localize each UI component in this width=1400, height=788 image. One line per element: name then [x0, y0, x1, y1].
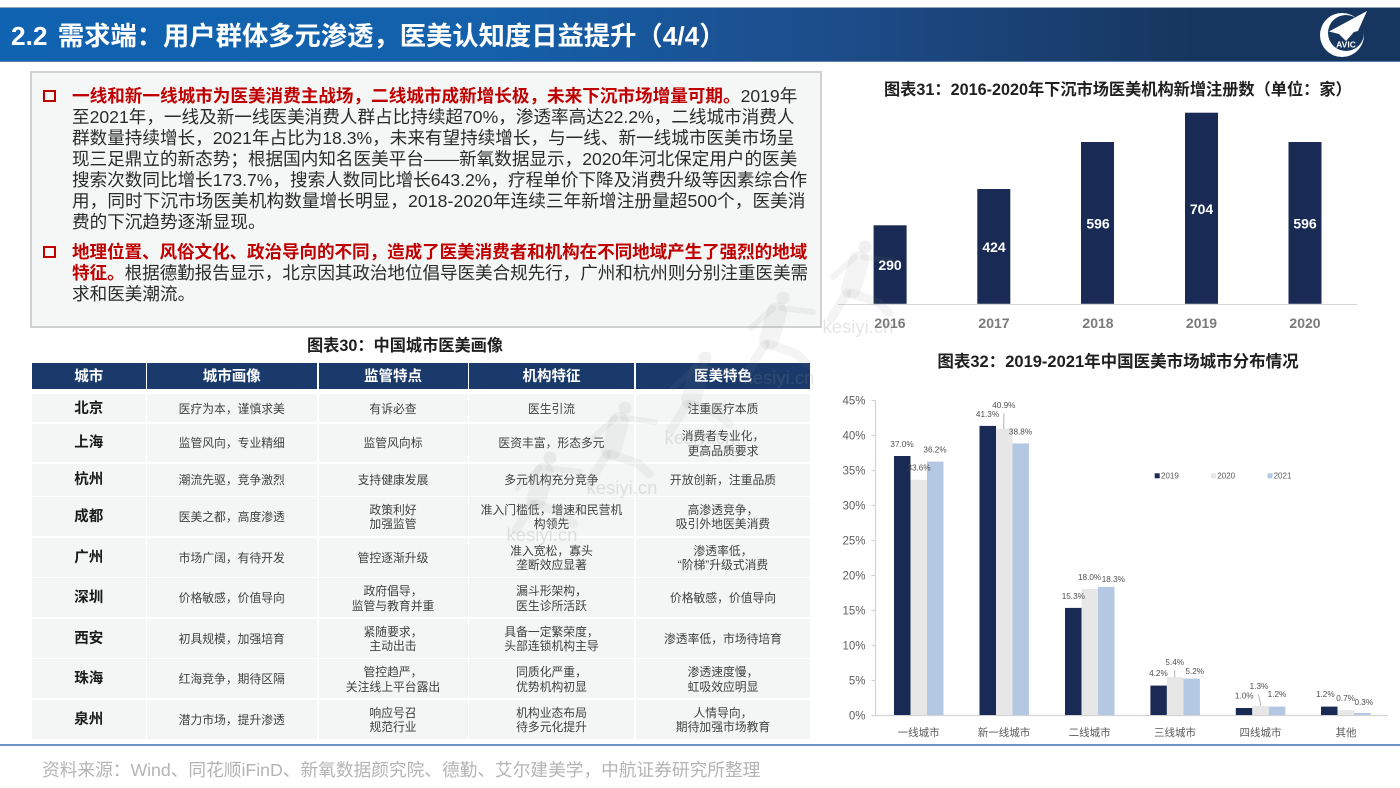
chart legend: 2019: [1161, 472, 1179, 481]
row: 上海: 消费者专业化，: [682, 429, 764, 443]
row: 西安: 渗透率低，市场待培育: [664, 632, 782, 646]
row: 成都: 高渗透竞争，: [688, 503, 758, 517]
paragraph one: 至2021年，一线及新一线医美消费人群占比持续超70%，渗透率高达22.2%，二线城市消费人: [72, 106, 794, 126]
bar chart: city tier distribution: [842, 396, 1388, 739]
row: 成都: 吸引外地医美消费: [676, 517, 770, 531]
bar chart: new registrations 2016-2020: 290: [878, 257, 902, 273]
bar chart: new registrations 2016-2020: 2020: [1289, 315, 1321, 331]
watermark: kesiyi.cn: [507, 524, 577, 545]
watermark: kesiyi.cn: [744, 367, 814, 388]
row: 北京: 有诉必查: [369, 402, 417, 416]
watermark: kesiyi.cn: [665, 427, 735, 448]
row: 泉州: 期待加强市场教育: [676, 720, 770, 734]
bar chart: new registrations 2016-2020: [838, 112, 1357, 331]
bar chart: city tier distribution: 0%: [849, 710, 866, 722]
row: 深圳: 漏斗形架构，: [516, 584, 587, 598]
row: 成都: 政策利好: [369, 503, 417, 517]
bar chart: city tier distribution: 38.8%: [1009, 428, 1032, 436]
watermark: kesiyi.cn: [823, 316, 893, 337]
row: 泉州: 响应号召: [369, 706, 417, 720]
row: 珠海: [32, 659, 810, 698]
bar chart: new registrations 2016-2020: 2019: [1186, 315, 1217, 331]
row: 深圳: 深圳: [74, 590, 103, 606]
row: 上海: 监管风向标: [364, 436, 422, 450]
bar chart: city tier distribution: 0.7%: [1336, 694, 1355, 703]
row: 泉州: 规范行业: [369, 720, 417, 734]
row: 深圳: 监管与教育并重: [352, 599, 434, 613]
row: 珠海: 珠海: [74, 671, 103, 687]
paragraph one: 一线和新一线城市为医美消费主战场，二线城市成新增长极，未来下沉市场增量可期。2019年: [72, 86, 797, 106]
row: 成都: 成都: [74, 509, 103, 525]
bar chart: city tier distribution: 10%: [842, 640, 866, 652]
source note: 资料来源：Wind、同花顺iFinD、新氧数据颜究院、德勤、艾尔建美学，中航证券研究所整理: [42, 760, 760, 780]
chart legend: 2021: [1274, 472, 1292, 481]
row: 深圳: 政府倡导，: [364, 584, 422, 598]
row: 泉州: 人情导向，: [693, 706, 752, 720]
bar chart: city tier distribution: 18.3%: [1102, 575, 1125, 584]
row: 广州: 渗透率低，: [694, 544, 752, 558]
bar chart: city tier distribution: 1.3%: [1250, 682, 1268, 691]
row: 北京: 医生引流: [528, 402, 575, 416]
bar chart: city tier distribution: 35%: [842, 466, 866, 478]
heading: chart 31 title: 图表31：2016-2020年下沉市场医美机构新增注册数（单位：家）: [884, 81, 1352, 99]
row: 杭州: 开放创新，注重品质: [670, 473, 776, 487]
row: 上海: 上海: [74, 435, 103, 451]
paragraph one: 用，同时下沉市场医美机构数量增长明显，2018-2020年连续三年新增注册量超500个，医美消: [72, 191, 806, 211]
bar chart: city tier distribution: 25%: [842, 536, 866, 548]
bar chart: new registrations 2016-2020: 596: [1293, 216, 1317, 232]
row: 泉州: 泉州: [74, 712, 103, 728]
bar chart: city tier distribution: 1.0%: [1235, 692, 1254, 700]
bar chart: city tier distribution: 40.9%: [992, 401, 1015, 410]
row: 西安: 初具规模，加强培育: [179, 632, 285, 646]
bar chart: city tier distribution: 45%: [842, 396, 866, 408]
row: 杭州: 支持健康发展: [358, 473, 428, 487]
row: 北京: 医疗为本，谨慎求美: [179, 402, 285, 416]
row: 珠海: 虹吸效应明显: [688, 680, 758, 694]
row: 西安: 头部连锁机构主导: [504, 639, 599, 653]
bar chart: new registrations 2016-2020: 2018: [1082, 315, 1114, 331]
row: 成都: 医美之都，高度渗透: [179, 510, 285, 524]
row: 珠海: 红海竞争，期待区隔: [179, 672, 285, 686]
bar chart: new registrations 2016-2020: 2017: [978, 315, 1010, 331]
icon: AVIC logo: [1320, 11, 1367, 57]
row: 珠海: 关注线上平台露出: [346, 680, 440, 694]
watermark: kesiyi.cn: [587, 477, 657, 498]
bar chart: city tier distribution: 三线城市: [1154, 726, 1196, 739]
bar chart: city tier distribution: 20%: [842, 570, 866, 582]
row: 成都: 准入门槛低，增速和民营机: [481, 503, 622, 517]
bar chart: city tier distribution: 5.2%: [1185, 667, 1204, 676]
bar chart: city tier distribution: 0.3%: [1354, 698, 1373, 707]
table header row: 监管特点: [364, 369, 422, 385]
bar chart: city tier distribution: 18.0%: [1078, 573, 1101, 582]
bar chart: city tier distribution: 41.3%: [976, 410, 999, 419]
paragraph two: 求和医美潮流。: [72, 284, 195, 304]
bullet one icon: [43, 90, 56, 102]
bar chart: new registrations 2016-2020: 2016: [874, 315, 906, 331]
bar chart: city tier distribution: 5.4%: [1165, 658, 1184, 667]
row: 深圳: 价格敏感，价值导向: [670, 591, 776, 605]
table header row: 机构特征: [522, 369, 580, 385]
row: 西安: 主动出击: [369, 639, 417, 653]
row: 深圳: [32, 578, 810, 617]
row: 广州: 市场广阔，有待开发: [179, 551, 285, 565]
row: 杭州: 潮流先驱，竞争激烈: [179, 473, 285, 487]
paragraph one: 现三足鼎立的新态势；根据国内知名医美平台——新氧数据显示，2020年河北保定用户的医美: [72, 149, 797, 169]
icon: AVIC logo: AVIC: [1336, 40, 1356, 50]
table header row: [32, 363, 810, 389]
row: 珠海: 渗透速度慢，: [688, 665, 758, 679]
bar chart: city tier distribution: 1.2%: [1316, 690, 1335, 699]
paragraph one: 群数量持续增长，2021年占比为18.3%，未来有望持续增长，与一线、新一线城市医美市场呈: [72, 128, 794, 148]
paragraph two: [72, 242, 808, 304]
paragraph one: 费的下沉趋势逐渐显现。: [72, 212, 266, 232]
row: 杭州: 多元机构充分竞争: [504, 473, 599, 487]
row: 西安: [32, 619, 810, 658]
chart legend: [1155, 472, 1292, 481]
row: 珠海: 同质化严重，: [516, 665, 587, 679]
row: 成都: 加强监管: [369, 517, 417, 531]
bar chart: city tier distribution: 新一线城市: [978, 726, 1030, 739]
row: 广州: 准入宽松，寡头: [510, 544, 593, 558]
panel: key takeaways: [30, 71, 822, 328]
row: 广州: 广州: [74, 550, 103, 566]
row: 广州: [32, 538, 810, 577]
row: 杭州: 杭州: [74, 472, 103, 488]
row: 杭州: [32, 464, 810, 496]
row: 珠海: 优势机构初显: [516, 680, 587, 694]
bar chart: city tier distribution: 4.2%: [1149, 669, 1168, 678]
row: 北京: 注重医疗本质: [688, 402, 758, 416]
bar chart: new registrations 2016-2020: 704: [1190, 201, 1213, 217]
row: 深圳: 医生诊所活跃: [516, 599, 587, 613]
row: 泉州: 机构业态布局: [516, 706, 587, 720]
chart legend: 2020: [1217, 472, 1236, 481]
bullet two icon: [43, 246, 56, 258]
heading: table title: 图表30：中国城市医美画像: [307, 337, 503, 355]
row: 泉州: 潜力市场，提升渗透: [179, 713, 285, 727]
row: 泉州: 待多元化提升: [516, 720, 587, 734]
bar chart: city tier distribution: 其他: [1336, 726, 1357, 739]
bar chart: city tier distribution: 37.0%: [890, 440, 914, 449]
bar chart: city tier distribution: 15%: [842, 606, 866, 618]
bar chart: new registrations 2016-2020: 424: [982, 239, 1006, 255]
bar chart: city tier distribution: 40%: [842, 430, 866, 442]
bar chart: city tier distribution: 5%: [849, 676, 866, 688]
bar chart: city tier distribution: 15.3%: [1062, 592, 1085, 601]
row: 成都: 构领先: [534, 517, 569, 531]
row: 深圳: 价格敏感，价值导向: [179, 591, 285, 605]
bar chart: city tier distribution: 33.6%: [907, 464, 931, 472]
row: 广州: 管控逐渐升级: [358, 551, 428, 565]
row: 珠海: 管控趋严，: [363, 665, 422, 679]
header bar: [0, 7, 1400, 62]
paragraph one: [72, 86, 807, 232]
table: city profiles: [32, 363, 810, 739]
row: 上海: 监管风向，专业精细: [179, 436, 285, 450]
bar chart: city tier distribution: 一线城市: [898, 726, 940, 739]
page title: 2.2 需求端：用户群体多元渗透，医美认知度日益提升（4/4）: [11, 21, 726, 51]
row: 上海: [32, 424, 810, 462]
paragraph two: 地理位置、风俗文化、政治导向的不同，造成了医美消费者和机构在不同地域产生了强烈的地域: [72, 242, 807, 262]
bar chart: city tier distribution: 30%: [842, 500, 866, 512]
row: 泉州: [32, 700, 810, 739]
row: 广州: “阶梯”升级式消费: [678, 558, 768, 572]
footer rule: [0, 744, 1400, 746]
row: 成都: [32, 497, 810, 536]
row: 西安: 具备一定繁荣度，: [504, 625, 599, 639]
table header row: 医美特色: [694, 369, 752, 385]
bar chart: new registrations 2016-2020: 596: [1086, 216, 1110, 232]
row: 上海: 更高品质要求: [688, 444, 758, 458]
row: 北京: 北京: [74, 401, 103, 417]
row: 西安: 西安: [74, 631, 103, 647]
bar chart: city tier distribution: 四线城市: [1240, 726, 1282, 739]
paragraph one: 搜索次数同比增长173.7%，搜索人数同比增长643.2%，疗程单价下降及消费升级等因素综合作: [72, 170, 807, 190]
bar chart: city tier distribution: 二线城市: [1069, 726, 1111, 739]
row: 广州: 垄断效应显著: [516, 558, 587, 572]
paragraph two: 特征。根据德勤报告显示，北京因其政治地位倡导医美合规先行，广州和杭州则分别注重医美需: [72, 263, 808, 283]
bar chart: city tier distribution: 36.2%: [923, 446, 947, 454]
row: 西安: 紧随要求，: [364, 625, 422, 639]
row: 北京: [32, 394, 810, 422]
table header row: 城市: [74, 369, 103, 385]
row: 上海: 医资丰富，形态多元: [498, 436, 605, 450]
table header row: 城市画像: [203, 369, 261, 385]
bar chart: city tier distribution: 1.2%: [1268, 690, 1286, 699]
heading: chart 32 title: 图表32：2019-2021年中国医美市场城市分布情况: [937, 353, 1299, 371]
